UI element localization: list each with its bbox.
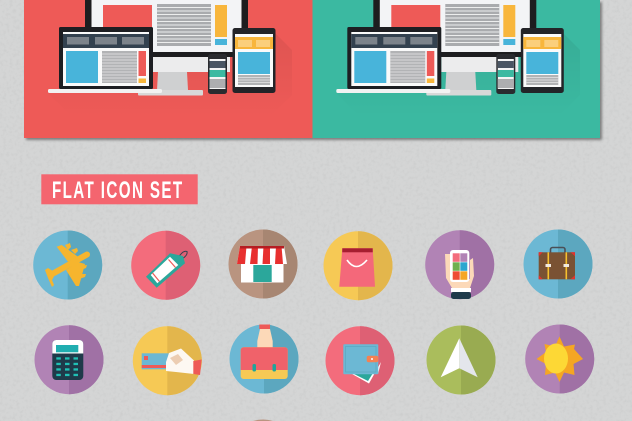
panel: teal responsive devices (312, 0, 600, 138)
icon: partial next-row circle (253, 420, 273, 421)
long shadow (336, 0, 580, 117)
icon: shopping bag (324, 231, 392, 300)
panel: red responsive devices (24, 0, 312, 138)
icon: calculator (34, 325, 104, 394)
title text: FLAT ICON SET (52, 178, 183, 204)
icon: airplane (33, 230, 102, 300)
devices copy (336, 0, 564, 96)
icon: suitcase (524, 230, 593, 298)
monitor (85, 0, 248, 96)
icon: sun (525, 324, 594, 394)
long shadow (48, 0, 292, 117)
panel shadow (26, 2, 602, 140)
icon: price tag (131, 231, 200, 300)
icon: wallet (326, 326, 394, 395)
tablet (232, 28, 276, 93)
icon: hand holding phone (425, 230, 494, 299)
laptop (48, 27, 162, 93)
icon: navigation arrow (426, 326, 496, 394)
smartphone (208, 54, 227, 94)
title banner (41, 174, 198, 204)
devices group (48, 0, 276, 96)
icon: storefront (228, 230, 298, 298)
icon: hand with credit card (133, 326, 202, 395)
icon: hand with briefcase (230, 324, 298, 394)
